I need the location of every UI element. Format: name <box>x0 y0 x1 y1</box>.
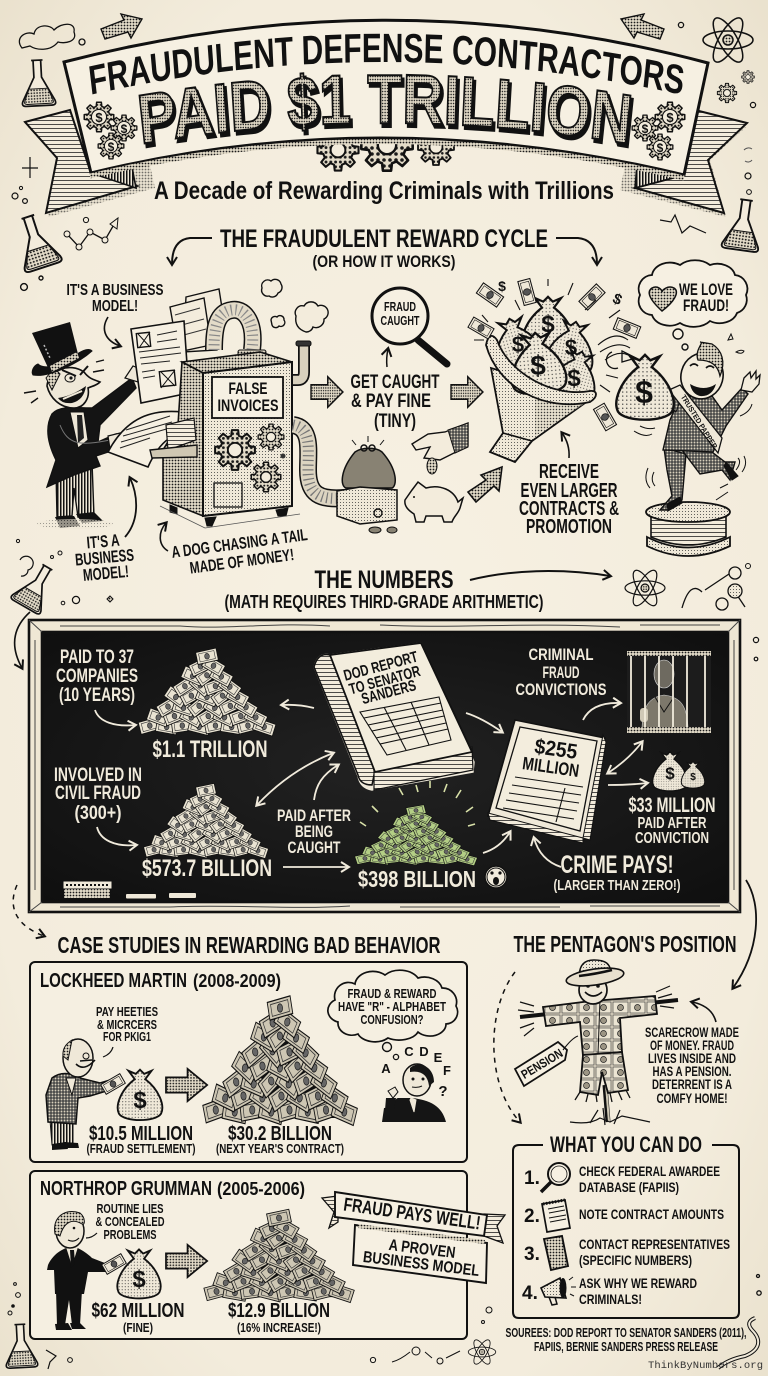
label: it's a business model lower <box>73 530 136 585</box>
arrow: machine to fine <box>311 377 343 407</box>
ribbon lower band: A PROVEN <box>388 1237 456 1262</box>
false invoice documents <box>108 289 222 467</box>
speech note: PAY HEETIES <box>96 1004 158 1019</box>
label: receive even larger contracts: EVEN LARGER <box>520 480 618 502</box>
arrows: 255 million to jail and bags <box>608 742 647 785</box>
roller and tray <box>166 418 196 450</box>
value: 30.2 billion <box>216 1123 344 1156</box>
note: scarecrow description: DETERRENT IS A <box>652 1077 732 1092</box>
flying bills: $ <box>610 290 625 309</box>
gears <box>215 430 255 470</box>
gears behind banner <box>317 119 454 171</box>
motion ticks <box>24 360 104 403</box>
speech note: PROBLEMS <box>104 1227 157 1242</box>
banner headline line 2: PAID $1 TRILLION <box>138 72 632 144</box>
banner headline line 2: PAID $1 TRILLION <box>145 76 634 148</box>
label: it's a business model top <box>66 282 164 346</box>
book: DoD report to Senator Sanders <box>314 643 474 790</box>
pipe top <box>214 310 253 350</box>
note: scarecrow description: LIVES INSIDE AND <box>648 1051 736 1066</box>
panel title: NORTHROP GRUMMAN <box>40 1177 212 1200</box>
value: 10.5 million: (FRAUD SETTLEMENT) <box>86 1141 196 1156</box>
step 1: 1. <box>524 1168 540 1189</box>
speech note: FOR PKIG1 <box>103 1029 151 1044</box>
panel: what you can do: WHAT YOU CAN DO <box>550 1132 702 1157</box>
money pile: 1.1 trillion <box>138 648 276 736</box>
value: 33 million paid after conviction: $33 MILLION <box>628 794 716 817</box>
heading: the numbers: (MATH REQUIRES THIRD-GRADE ARITHMETIC) <box>224 592 544 612</box>
character: confused man with letters: E <box>434 1050 443 1065</box>
decorations: left middle flask <box>10 539 113 668</box>
scarecrow made of money <box>515 960 678 1125</box>
step 2: 2. <box>524 1206 540 1227</box>
machine: false invoices: FALSE <box>228 379 268 398</box>
step 1: CHECK FEDERAL AWARDEE <box>579 1163 720 1179</box>
value: 62 million: $62 MILLION <box>92 1300 184 1322</box>
board note: paid after being caught: CAUGHT <box>288 838 341 857</box>
thought cloud: FRAUD & REWARD <box>348 986 436 1001</box>
label: it's a business model lower: MODEL! <box>82 562 130 585</box>
character: confused man with letters: ? <box>438 1083 448 1100</box>
coat <box>47 378 136 487</box>
label: get caught and pay fine <box>350 372 440 432</box>
ribbon: fraud pays well: FRAUD PAYS WELL! <box>342 1194 482 1234</box>
jacket <box>543 996 657 1056</box>
value: 12.9 billion: $12.9 BILLION <box>228 1300 330 1322</box>
value: 398 billion: $398 BILLION <box>358 866 476 892</box>
value: 1.1 trillion: $1.1 TRILLION <box>152 736 268 763</box>
funnel full of money bags: $ <box>530 350 546 381</box>
decorations: bottom left <box>4 1283 496 1369</box>
legs <box>56 462 94 517</box>
ribbon lower band <box>353 1224 487 1283</box>
money bag in hand <box>616 355 674 420</box>
label: it's a business model lower: BUSINESS <box>74 545 135 570</box>
legs <box>660 448 686 510</box>
thought bubble: we love fraud <box>639 260 747 350</box>
dashed arc to scarecrow <box>494 972 520 1122</box>
arrow: report to 255 million <box>466 713 502 732</box>
arrow: business model up <box>125 478 136 537</box>
dollar gears left <box>84 102 137 159</box>
pipe right small <box>293 345 304 380</box>
board note: crime pays: (LARGER THAN ZERO!) <box>554 877 681 894</box>
step 3: (SPECIFIC NUMBERS) <box>579 1252 692 1268</box>
step 3 <box>524 1236 730 1270</box>
label: it's a business model lower: IT'S A <box>86 531 120 552</box>
label: receive even larger contracts: PROMOTION <box>526 516 612 538</box>
funnel rim <box>486 336 596 404</box>
value: 30.2 billion: (NEXT YEAR'S CONTRACT) <box>216 1141 344 1156</box>
arms stick <box>520 1000 678 1017</box>
dollar gears left: $ <box>95 110 103 125</box>
ribbon lower band: BUSINESS MODEL <box>362 1249 480 1280</box>
hands <box>125 366 138 382</box>
head <box>579 976 607 1004</box>
thought cloud: CONFUSION? <box>360 1012 424 1027</box>
icon: money bag: $ <box>133 1087 147 1114</box>
report table <box>360 697 451 755</box>
icon: money bags on board <box>653 752 705 791</box>
chalkboard panel <box>29 620 740 912</box>
dollar gears right <box>632 102 685 160</box>
board note: paid after being caught: BEING <box>295 822 333 841</box>
panel title: (2005-2006) <box>217 1179 305 1199</box>
value: 62 million <box>92 1300 184 1335</box>
character: confused man with letters: A <box>381 1061 391 1076</box>
character: top hat executive <box>24 322 138 529</box>
value: 573.7 billion: $573.7 BILLION <box>142 855 272 882</box>
banner body <box>64 20 708 175</box>
thought cloud: HAVE "R" - ALPHABET <box>338 999 446 1014</box>
decoration: squiggle bottom right <box>718 1274 761 1368</box>
panel: Northrop Grumman <box>30 1171 467 1339</box>
panel: what you can do <box>513 1132 739 1318</box>
money pile <box>203 996 357 1126</box>
board note: paid to 37 companies <box>56 647 138 725</box>
icon: money bag <box>117 1249 161 1298</box>
arrow: report to pile 1 <box>282 705 314 708</box>
value: 62 million: (FINE) <box>123 1320 153 1335</box>
pedestal <box>646 502 730 556</box>
label: a dog chasing a tail: MADE OF MONEY! <box>189 546 295 578</box>
character: happy contractor: $ <box>635 374 653 410</box>
step 2 <box>524 1200 724 1232</box>
machine: false invoices: INVOICES <box>218 396 278 415</box>
sash <box>669 385 722 453</box>
bags <box>487 297 604 406</box>
dollar gears right: $ <box>657 141 664 155</box>
value: 10.5 million: $10.5 MILLION <box>89 1123 193 1145</box>
step 4: CRIMINALS! <box>579 1291 642 1307</box>
decorations: atom and molecule <box>625 564 759 661</box>
heading: the numbers: THE NUMBERS <box>314 566 454 594</box>
motion lines <box>634 404 752 500</box>
board note: crime pays: CRIME PAYS! <box>560 851 674 879</box>
character: happy contractor: TRUSTED PAPPER <box>679 393 720 451</box>
ribbon: fraud pays well <box>322 1192 505 1283</box>
chalk and eraser <box>63 881 196 898</box>
icon: money bags on board: $ <box>665 764 675 783</box>
book: 255 million: MILLION <box>521 753 580 781</box>
wooden frame <box>29 620 740 912</box>
board note: criminal fraud convictions <box>516 645 620 720</box>
thought cloud <box>328 970 458 1060</box>
book: 255 million: $255 <box>533 735 579 764</box>
book: DoD report to Senator Sanders: DOD REPORT <box>342 649 420 685</box>
subtitle: A Decade of Rewarding Criminals with Trillions <box>154 177 614 205</box>
dashed arrow: board to case studies <box>13 885 44 936</box>
label: receive even larger contracts: RECEIVE <box>539 461 599 483</box>
board note: involved in civil fraud: (300+) <box>74 803 122 824</box>
board note: paid to 37 companies: PAID TO 37 <box>60 647 134 668</box>
label plate <box>212 377 283 418</box>
dollar gears right: $ <box>642 122 649 136</box>
money pile: 573.7 billion <box>144 783 269 859</box>
speech note <box>96 1004 158 1057</box>
title banner <box>23 18 749 258</box>
step 4: ASK WHY WE REWARD <box>579 1275 697 1291</box>
board note: paid after being caught: PAID AFTER <box>277 806 351 825</box>
panel title: LOCKHEED MARTIN <box>40 969 187 992</box>
decorations: top corners <box>10 14 765 273</box>
thought bubble: we love fraud: WE LOVE <box>679 281 733 299</box>
board note: paid to 37 companies: COMPANIES <box>56 666 138 687</box>
value: 12.9 billion <box>228 1300 330 1335</box>
heading: the fraudulent reward cycle: THE FRAUDULENT REWARD CYCLE <box>220 225 548 253</box>
speech note: & CONCEALED <box>96 1214 164 1229</box>
thought bubble: we love fraud: FRAUD! <box>683 297 729 315</box>
heading: the fraudulent reward cycle <box>172 225 597 271</box>
funnel full of money bags: $ <box>541 311 555 338</box>
step 4: 4. <box>522 1283 538 1304</box>
flying bills: $ <box>498 278 506 294</box>
board note: involved in civil fraud: CIVIL FRAUD <box>55 783 141 804</box>
label: a dog chasing a tail <box>170 526 311 580</box>
step 1: DATABASE (FAPIIS) <box>579 1179 679 1195</box>
arrow: piggy to funnel <box>468 467 502 502</box>
funnel full of money bags: $ <box>512 332 524 357</box>
value: 30.2 billion: $30.2 BILLION <box>228 1123 332 1145</box>
icon: magnifier fraud caught: FRAUD <box>384 300 416 314</box>
heading: case studies: CASE STUDIES IN REWARDING BAD BEHAVIOR <box>58 932 441 958</box>
dollar gears left: $ <box>108 140 115 154</box>
lower pipe <box>293 425 345 498</box>
label: it's a business model top: IT'S A BUSINESS <box>66 282 164 299</box>
note: scarecrow description <box>645 1002 739 1106</box>
funnel full of money bags <box>486 297 604 462</box>
flying bills <box>468 278 641 431</box>
panel: Lockheed Martin <box>30 962 467 1162</box>
value: 10.5 million <box>86 1123 196 1156</box>
curved arrow: board to scarecrow <box>733 880 756 988</box>
speech note <box>86 1201 164 1242</box>
icon: money bags on board: $ <box>690 772 696 783</box>
step 3: 3. <box>524 1244 540 1265</box>
main paper <box>131 321 189 403</box>
funnel full of money bags: $ <box>565 335 577 360</box>
jail cell with prisoner <box>627 651 711 733</box>
character: man in black suit <box>47 1212 126 1330</box>
coin purse on box <box>337 436 397 533</box>
value: 33 million paid after conviction: CONVICTION <box>635 830 709 847</box>
book: 255 million <box>488 720 606 843</box>
hand dropping coin <box>412 423 468 474</box>
arrow <box>166 1069 207 1101</box>
icon: money bag <box>118 1070 162 1120</box>
top hat <box>32 322 79 372</box>
arrows: green pile and crime pays to book <box>483 832 561 867</box>
character: happy contractor <box>616 334 760 511</box>
character: confused man with letters: D <box>419 1044 429 1059</box>
character: confused man with letters <box>381 1044 451 1122</box>
heading: the fraudulent reward cycle: (OR HOW IT WORKS) <box>312 252 456 271</box>
label: receive even larger contracts <box>519 433 619 538</box>
icon: shocked face <box>485 866 507 888</box>
speech note: & MICRCERS <box>97 1017 157 1032</box>
money pile: green 398 billion <box>355 781 477 866</box>
book: DoD report to Senator Sanders: TO SENATOR <box>347 663 422 698</box>
funnel full of money bags: $ <box>567 365 581 392</box>
hand waving <box>741 371 760 392</box>
heading: the numbers <box>224 566 610 612</box>
speech note: ROUTINE LIES <box>96 1201 164 1216</box>
label: a dog chasing a tail: A DOG CHASING A TAIL <box>170 526 309 562</box>
banner headline line 1: FRAUDULENT DEFENSE CONTRACTORS <box>89 34 684 94</box>
machine: false invoices <box>150 310 345 526</box>
panel title: (2008-2009) <box>193 971 281 991</box>
dollar gears right: $ <box>666 110 674 125</box>
dollar gears left: $ <box>121 122 128 136</box>
character: confused man with letters: C <box>404 1044 414 1059</box>
torso <box>663 388 748 452</box>
label: get caught and pay fine: GET CAUGHT <box>350 372 440 393</box>
shadow under machine <box>160 506 300 528</box>
pension tag: PENSION <box>519 1046 565 1082</box>
label: it's a business model top: MODEL! <box>92 298 138 315</box>
trousers <box>580 1052 628 1095</box>
board note: involved in civil fraud: INVOLVED IN <box>54 765 142 786</box>
note: scarecrow description: HAS A PENSION. <box>652 1064 732 1079</box>
pole and grass <box>605 1085 608 1122</box>
value: 12.9 billion: (16% INCREASE!) <box>237 1320 321 1335</box>
value: 33 million paid after conviction <box>628 794 716 847</box>
character: bald executive <box>46 1039 125 1150</box>
step 1 <box>524 1163 720 1195</box>
board note: paid after being caught <box>257 753 351 857</box>
step 4 <box>522 1275 697 1307</box>
arrow: dog chasing <box>160 523 168 551</box>
money pile <box>204 1209 354 1303</box>
watermark: ThinkByNumbers.org <box>648 1360 763 1372</box>
small circles near cycle <box>21 276 43 290</box>
label: get caught and pay fine: (TINY) <box>374 411 416 432</box>
board note: paid to 37 companies: (10 YEARS) <box>59 685 135 706</box>
arrow <box>166 1245 207 1277</box>
value: 33 million paid after conviction: PAID AFTER <box>638 815 707 832</box>
arrow: fine to funnel <box>451 377 483 407</box>
body <box>182 352 292 373</box>
character: confused man with letters: F <box>443 1063 451 1078</box>
head <box>47 368 100 408</box>
label: receive even larger contracts: CONTRACTS & <box>519 498 619 520</box>
label: get caught and pay fine: & PAY FINE <box>351 391 431 412</box>
note: scarecrow description: COMFY HOME! <box>656 1091 728 1106</box>
arrow: 573.7 billion to 398 billion <box>283 866 348 868</box>
icon: magnifier fraud caught: CAUGHT <box>380 314 420 328</box>
board note: criminal fraud convictions: CONVICTIONS <box>516 680 606 699</box>
icon: money bag: $ <box>132 1266 146 1293</box>
sources <box>506 1325 746 1354</box>
board note: criminal fraud convictions: FRAUD <box>542 663 580 682</box>
paper back <box>183 289 222 352</box>
book: DoD report to Senator Sanders: SANDERS <box>360 677 418 708</box>
icon: magnifier fraud caught <box>372 288 447 367</box>
scroll paper <box>108 411 197 467</box>
icon: piggy bank <box>405 482 463 522</box>
clouds of smoke <box>262 279 328 332</box>
ribbon tails <box>25 110 747 217</box>
board note: crime pays <box>554 851 681 894</box>
board surface <box>42 632 728 902</box>
head <box>676 348 728 404</box>
hat <box>579 960 611 975</box>
board note: involved in civil fraud <box>54 765 142 845</box>
board note: criminal fraud convictions: CRIMINAL <box>528 645 594 664</box>
